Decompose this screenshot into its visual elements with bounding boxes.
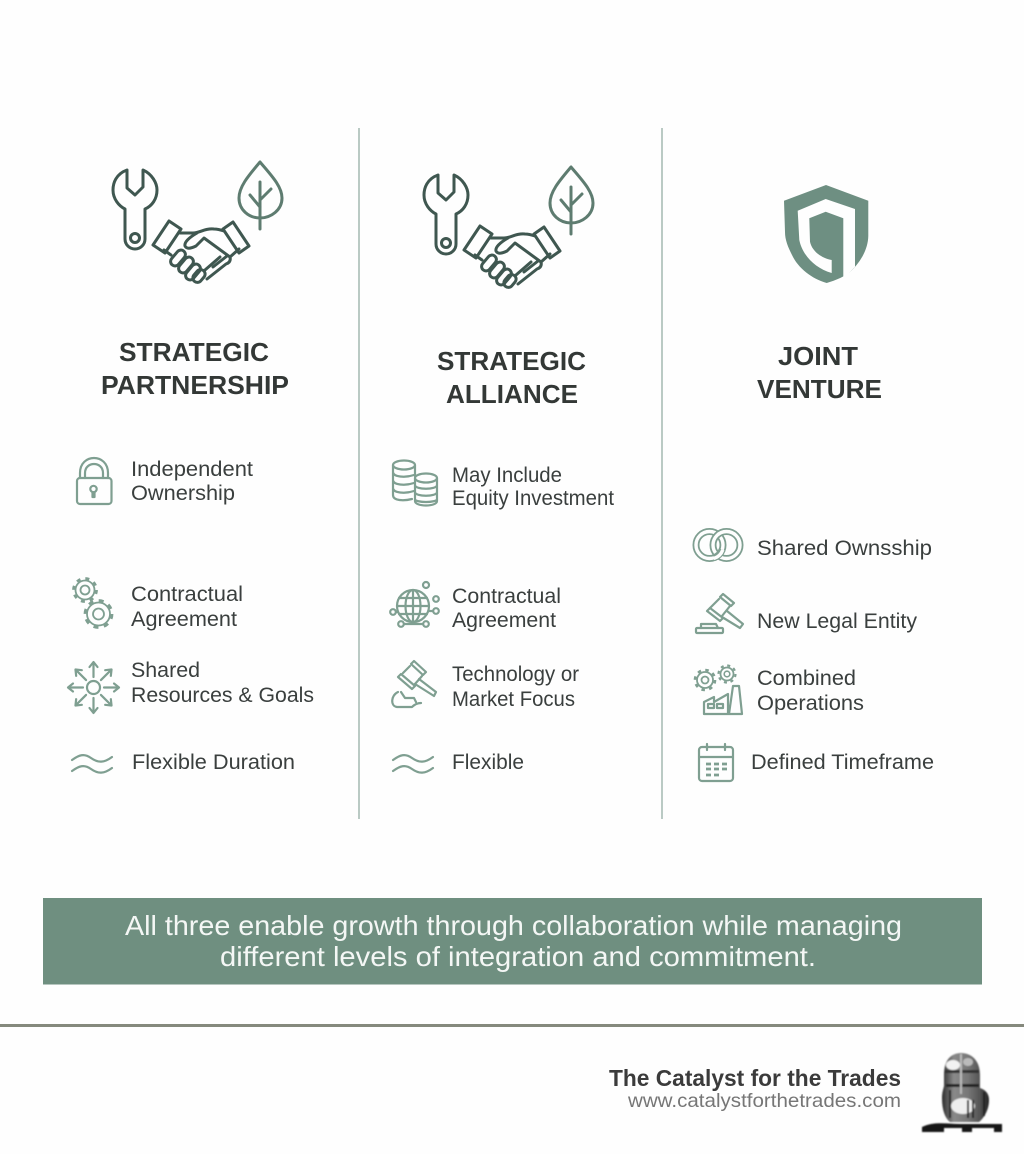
- text: contractual agreement: [131, 583, 243, 631]
- text: combined operations: Combined: [757, 667, 856, 690]
- heading: strategic alliance: [437, 346, 586, 409]
- heading: strategic partnership: STRATEGIC: [119, 337, 269, 367]
- text: technology or market focus: Technology or: [452, 663, 579, 686]
- text: shared resources and goals: [131, 659, 314, 707]
- heading: strategic alliance: STRATEGIC: [437, 346, 586, 376]
- icon: shield: [784, 185, 868, 283]
- icon: radiating arrows: [68, 662, 119, 713]
- footer brand text: The Catalyst for the Trades: [609, 1065, 901, 1091]
- text: technology or market focus: [452, 663, 579, 711]
- text: contractual agreement: Contractual: [452, 585, 561, 608]
- text: independent ownership: Ownership: [131, 482, 235, 505]
- text: shared resources and goals: Shared: [131, 659, 200, 682]
- text: contractual agreement: Contractual: [131, 583, 243, 606]
- text: independent ownership: Independent: [131, 458, 253, 481]
- text: may include equity investment: Equity Investment: [452, 487, 614, 510]
- text: contractual agreement: [452, 585, 561, 632]
- icon: gears: [74, 578, 112, 628]
- text: may include equity investment: May Include: [452, 464, 562, 487]
- icon: gears and factory: [695, 666, 742, 714]
- text: may include equity investment: [452, 464, 614, 510]
- icon: interlocked rings: [696, 532, 740, 558]
- text: defined timeframe: Defined Timeframe: [751, 751, 934, 774]
- icon: wrench, handshake and leaf: [424, 167, 593, 289]
- footer brand text: www.catalystforthetrades.com: [627, 1090, 901, 1112]
- text: contractual agreement: Agreement: [131, 608, 237, 631]
- icon: waves: [393, 755, 433, 773]
- text: combined operations: [757, 667, 864, 715]
- panel: strategic partnership: [68, 162, 314, 774]
- heading: strategic alliance: ALLIANCE: [446, 379, 578, 409]
- text: contractual agreement: Agreement: [452, 609, 556, 632]
- callout banner: different levels of integration and commitment.: [220, 941, 816, 972]
- icon: coin stacks: [393, 460, 437, 506]
- heading: joint venture: [757, 341, 882, 404]
- callout banner: All three enable growth through collaboration while managing: [125, 910, 902, 941]
- icon: microphone logo: [922, 1053, 1002, 1132]
- heading: strategic partnership: [101, 337, 289, 400]
- text: independent ownership: [131, 458, 253, 505]
- text: new legal entity: New Legal Entity: [757, 610, 917, 633]
- text: shared ownsship: Shared Ownsship: [757, 537, 932, 560]
- text: flexible duration: Flexible Duration: [132, 751, 295, 774]
- icon: wrench, handshake and leaf: [113, 162, 282, 284]
- icon: gavel on block: [696, 594, 743, 633]
- icon: waves: [72, 755, 112, 773]
- icon: calendar: [699, 744, 733, 781]
- panel: strategic alliance: [390, 167, 614, 774]
- heading: strategic partnership: PARTNERSHIP: [101, 370, 289, 400]
- text: flexible: Flexible: [452, 751, 524, 774]
- icon: networked globe: [390, 582, 439, 627]
- text: combined operations: Operations: [757, 692, 864, 715]
- text: shared resources and goals: Resources & Goals: [131, 684, 314, 707]
- footer brand text: [609, 1065, 901, 1112]
- icon: padlock: [77, 458, 112, 504]
- heading: joint venture: VENTURE: [757, 374, 882, 404]
- icon: gavel and hand: [392, 661, 436, 707]
- text: technology or market focus: Market Focus: [452, 688, 575, 711]
- callout banner: [43, 898, 982, 984]
- panel: joint venture: [695, 185, 934, 781]
- heading: joint venture: JOINT: [778, 341, 858, 371]
